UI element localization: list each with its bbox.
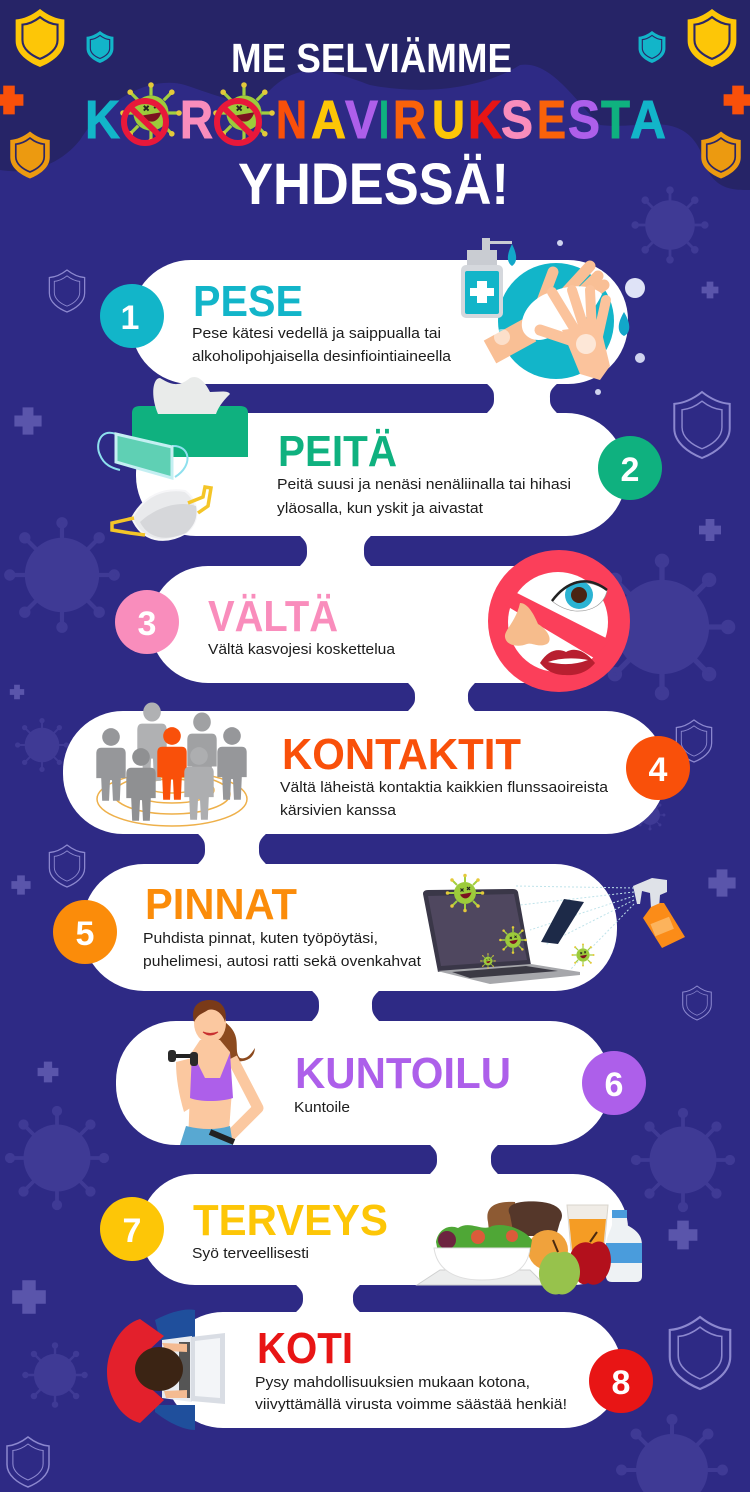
- number 4: [626, 736, 690, 800]
- heading: peitä: PEITÄ: [278, 427, 397, 476]
- coloured title line: N: [276, 90, 307, 150]
- panel: terveys: [140, 1174, 628, 1285]
- section 7: [100, 1196, 642, 1295]
- panel: kuntoilu: [116, 1021, 610, 1145]
- number 7: [100, 1197, 164, 1261]
- icon: crossed-out virus 2: [213, 82, 275, 144]
- coloured title line: T: [601, 90, 630, 150]
- coloured title line: R: [180, 90, 213, 150]
- icon: laptop and phone with viruses: [423, 874, 595, 984]
- text: kontaktit: Vältä läheistä kontaktia kaikkien flunssaoireista: [280, 779, 609, 796]
- heading: kuntoilu: KUNTOILU: [295, 1049, 511, 1098]
- number 3: [115, 590, 179, 654]
- coloured title line: U: [432, 90, 465, 150]
- text: pinnat: [143, 930, 422, 970]
- icon: surgical mask: [98, 433, 187, 478]
- icon: person at laptop from above: [107, 1309, 225, 1430]
- number 5: 5: [76, 915, 94, 953]
- text: koti: Pysy mahdollisuuksien mukaan kotona,: [255, 1374, 530, 1391]
- section 5: [53, 874, 685, 984]
- connector panels: [486, 383, 558, 414]
- coloured title line: R: [393, 90, 426, 150]
- background pattern: crosses: [10, 282, 736, 1314]
- number 2: [598, 436, 662, 500]
- text: peitä: yläosalla, kun yskit ja aivastat: [277, 500, 484, 517]
- background pattern: shields: [7, 270, 730, 1487]
- icon: healthy food: [417, 1201, 642, 1295]
- number 4: 4: [649, 751, 668, 789]
- icon: group of people: [96, 702, 247, 826]
- number 5: [53, 900, 117, 964]
- coloured title line: S: [568, 90, 600, 150]
- icon: spray bottle: [633, 878, 685, 948]
- heading: koti: KOTI: [257, 1324, 353, 1373]
- section 3: [115, 550, 630, 692]
- panel: pese: [131, 260, 628, 384]
- text: koti: [255, 1374, 567, 1413]
- section 2: [98, 377, 662, 540]
- text: koti: viivyttämällä virusta voimme säästää henkiä!: [255, 1396, 567, 1413]
- section 8: [107, 1309, 653, 1430]
- panel: pinnat: [82, 864, 617, 991]
- panel: kontaktit: [63, 711, 666, 834]
- text: pese: [192, 325, 452, 365]
- panel: peitä: [136, 413, 626, 536]
- coloured title line: [85, 90, 666, 150]
- section 1: [100, 238, 645, 395]
- white connected panels: [63, 260, 666, 1428]
- title: ME SELVIÄMME: [231, 35, 512, 81]
- coloured title line: A: [311, 90, 346, 150]
- section 6: [168, 1000, 646, 1145]
- text: peitä: [277, 476, 571, 517]
- heading: pese: PESE: [193, 277, 303, 326]
- panel: koti: [165, 1312, 622, 1428]
- text: pinnat: Puhdista pinnat, kuten työpöytäsi,: [143, 930, 378, 947]
- icon: tissue box: [132, 377, 248, 457]
- icon: respirator mask: [112, 487, 211, 540]
- title: [85, 35, 666, 217]
- icon: spray lines: [515, 886, 634, 970]
- icon: do not touch face: [488, 550, 630, 692]
- text: terveys: Syö terveellisesti: [192, 1245, 309, 1262]
- number 8: [589, 1349, 653, 1413]
- coloured title line: A: [630, 90, 666, 150]
- number 8: 8: [612, 1364, 630, 1402]
- icon: washing hands and sanitizer: [461, 238, 645, 395]
- header icons: shields and crosses: [0, 9, 750, 179]
- number 6: 6: [605, 1066, 623, 1104]
- coloured title line: S: [501, 90, 533, 150]
- heading: terveys: TERVEYS: [193, 1196, 388, 1245]
- number 6: [582, 1051, 646, 1115]
- text: kuntoile: Kuntoile: [294, 1099, 350, 1116]
- dark header shape: [0, 0, 750, 190]
- number 3: 3: [138, 605, 156, 643]
- coloured title line: K: [468, 90, 502, 150]
- number 2: 2: [621, 451, 639, 489]
- number 1: [100, 284, 164, 348]
- panel: vältä: [150, 566, 626, 683]
- title: YHDESSÄ!: [238, 152, 509, 217]
- text: kontaktit: [280, 779, 609, 819]
- text: peitä: Peitä suusi ja nenäsi nenäliinalla tai hihasi: [277, 476, 571, 493]
- text: pese: Pese kätesi vedellä ja saippualla tai: [192, 325, 441, 342]
- icon: woman exercising: [168, 1000, 258, 1145]
- heading: vältä: VÄLTÄ: [208, 592, 338, 641]
- coloured title line: I: [379, 90, 389, 150]
- text: pinnat: puhelimesi, autosi ratti sekä ovenkahvat: [143, 953, 422, 970]
- coloured title line: V: [345, 90, 378, 150]
- heading: kontaktit: KONTAKTIT: [282, 730, 521, 779]
- coloured title line: K: [85, 90, 120, 150]
- text: vältä: Vältä kasvojesi koskettelua: [208, 641, 396, 658]
- connectors between panels: [197, 535, 499, 1313]
- text: pese: alkoholipohjaisella desinfiointiaineella: [192, 348, 452, 365]
- heading: pinnat: PINNAT: [145, 880, 297, 929]
- number 7: 7: [123, 1212, 141, 1250]
- coloured title line: E: [537, 90, 566, 150]
- icon: crossed-out virus 1: [120, 82, 182, 144]
- number 1: 1: [121, 299, 139, 337]
- section 4: [96, 702, 690, 826]
- text: kontaktit: kärsivien kanssa: [280, 802, 397, 819]
